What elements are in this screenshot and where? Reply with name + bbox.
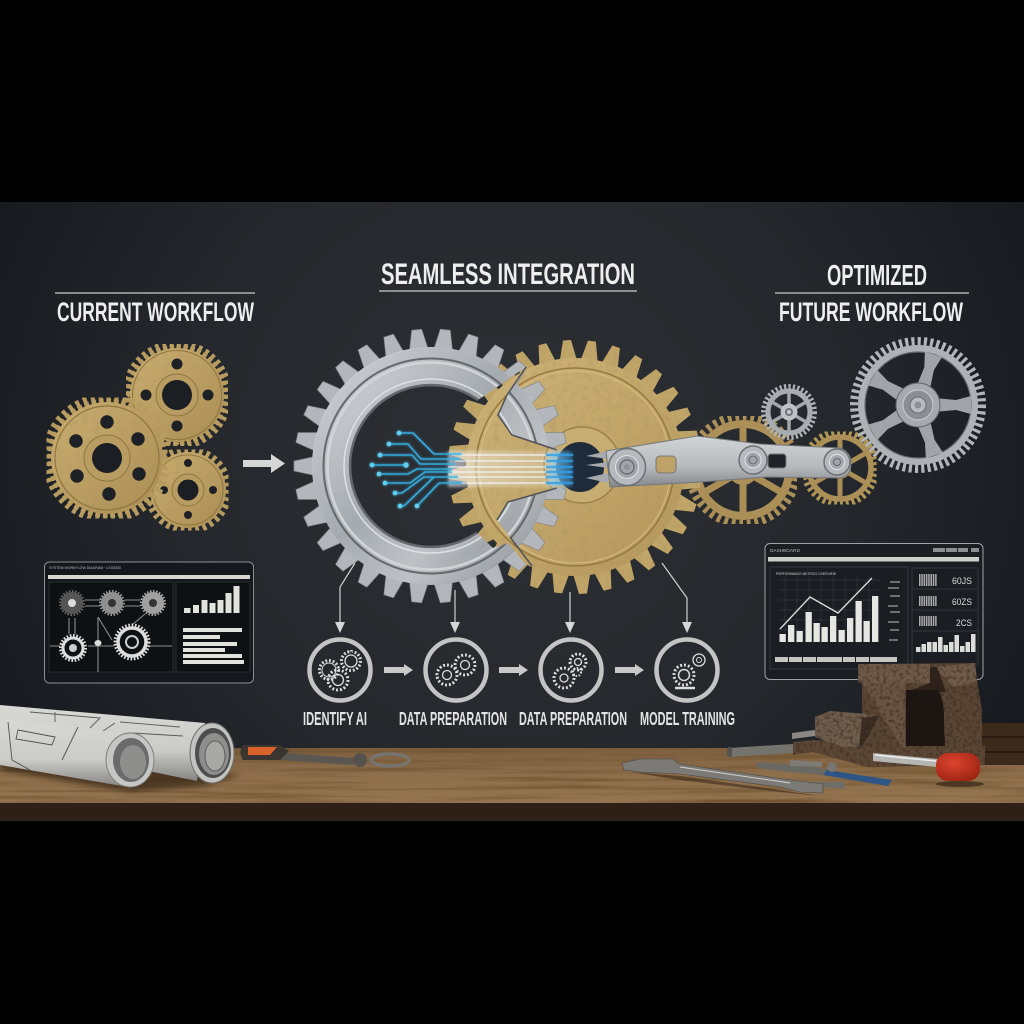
vise jaw face <box>859 715 880 747</box>
gear: small silver <box>764 386 814 438</box>
tool: orange wrench <box>240 745 409 767</box>
metric dividers <box>912 589 978 631</box>
vise upper throat <box>906 667 946 692</box>
back plank <box>982 723 1024 765</box>
gear: top right brass <box>126 344 228 446</box>
icon: blue circuit traces <box>370 431 462 508</box>
metric value 1: 60JS <box>952 576 972 587</box>
legend strip <box>775 657 897 662</box>
dashboard title text: SYSTEM WORKFLOW DIAGRAM · LEGEND <box>49 565 121 570</box>
metric value 2: 60ZS <box>952 597 972 608</box>
horizontal bar chart <box>183 628 244 664</box>
label: DATA PREPARATION <box>519 709 627 729</box>
vise dark throat <box>906 690 945 746</box>
title: seamless integration: SEAMLESS INTEGRATION <box>381 258 635 291</box>
dashboard header text: DASHBOARD <box>770 548 801 553</box>
gear: large silver AI gear (C-shaped main part) <box>294 328 526 604</box>
vise screw rods <box>727 727 838 757</box>
bar chart with trend line <box>780 578 878 642</box>
gear fragment: silver lower piece <box>497 488 566 551</box>
arrow: step 2 to 3 <box>499 664 528 676</box>
icon: gears in ring <box>540 640 602 700</box>
current workflow gears <box>46 344 228 530</box>
arrow: step 3 to 4 <box>615 664 644 676</box>
blueprint rolls <box>0 705 240 792</box>
front roll <box>0 719 154 787</box>
icon: gears in ring <box>656 640 718 700</box>
step 2: data preparation <box>399 640 507 729</box>
dashboard header buttons <box>933 548 979 552</box>
arm slot: dark <box>768 454 786 468</box>
vise base <box>793 740 985 767</box>
mechanical arm <box>586 436 851 487</box>
icon: gears in ring <box>426 640 486 700</box>
gear: spoked brass <box>689 416 797 524</box>
chart caption: PERFORMANCE METRICS OVERVIEW <box>776 571 836 576</box>
tool: red handled screwdriver <box>873 753 984 787</box>
panel: current workflow dashboard <box>44 562 254 683</box>
vise front jaw <box>815 711 880 747</box>
vise right jaw <box>935 663 977 687</box>
metric value 3: 2CS <box>956 618 972 629</box>
title: optimized future workflow <box>775 260 969 327</box>
bar chart <box>184 586 240 613</box>
vise body <box>858 663 982 748</box>
gear: small brass <box>804 432 876 504</box>
dark chalkboard panel <box>0 202 1024 752</box>
label: MODEL TRAINING <box>640 709 735 729</box>
workflow diagram of gears <box>50 592 172 672</box>
vise and back plank <box>727 663 1024 767</box>
metric sparklines <box>919 580 937 621</box>
brass hub ring <box>544 427 620 503</box>
arrow: current workflow to integration <box>243 454 285 473</box>
tool: combination wrench <box>622 759 845 796</box>
arrow: step 1 to 2 <box>384 664 413 676</box>
small bar chart <box>916 634 976 652</box>
title: optimized future workflow: OPTIMIZED <box>827 260 927 292</box>
title: current workflow: CURRENT WORKFLOW <box>57 297 254 327</box>
data beam between the gears <box>448 451 573 487</box>
arm joint: front <box>608 448 646 486</box>
label: IDENTIFY AI <box>303 709 367 729</box>
step 4: model training <box>640 640 735 729</box>
hub hole <box>556 442 604 492</box>
arm slot: brass visible <box>656 456 676 473</box>
gear: lower right brass <box>148 450 228 530</box>
gear: large brass integration gear <box>440 332 710 602</box>
tool: blue handled tool <box>757 760 892 786</box>
arm prongs <box>586 451 608 483</box>
axis tick labels <box>888 582 900 640</box>
step 3: data preparation <box>519 640 627 729</box>
arm body <box>606 436 851 487</box>
gear: large left brass <box>46 398 168 518</box>
vise top plate <box>858 664 930 683</box>
gear fragment: silver upper piece <box>498 367 566 448</box>
arm joint: middle <box>739 446 767 474</box>
icon: gears in ring <box>310 640 370 700</box>
vise casting <box>793 663 985 767</box>
back roll <box>0 705 234 783</box>
arm joint: rear <box>824 449 850 475</box>
label: DATA PREPARATION <box>399 709 507 729</box>
small gears behind the mechanical arm <box>689 386 876 524</box>
chart grid <box>778 576 880 644</box>
wooden table <box>0 748 1024 821</box>
panel: optimized dashboard <box>765 544 983 680</box>
step 1: identify AI <box>303 640 370 729</box>
vise left pillar <box>862 682 905 748</box>
arrows from gears to steps <box>335 563 692 633</box>
gear: optimized silver gear <box>854 342 982 468</box>
crack lines on silver gear <box>497 367 557 566</box>
